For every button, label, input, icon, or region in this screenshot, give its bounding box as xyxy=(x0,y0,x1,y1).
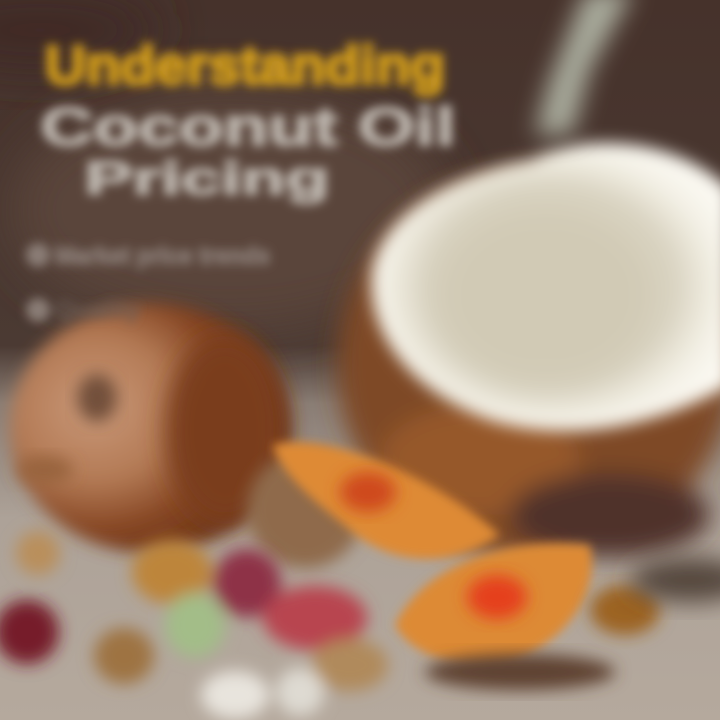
illustration: whole coconut xyxy=(10,303,290,553)
coconut shell xyxy=(337,170,720,560)
large orange slice xyxy=(272,442,500,559)
coconut eye xyxy=(77,374,117,422)
illustration: scattered berries and nuts xyxy=(0,531,388,719)
illustration: halved coconut with spoon xyxy=(337,0,720,560)
spoon handle xyxy=(535,0,634,135)
bullet one: Market price trends xyxy=(55,242,270,270)
title line 1: Understanding xyxy=(45,34,445,96)
bullet text block xyxy=(26,242,270,324)
bullet two: Quality xyxy=(55,297,141,324)
title xyxy=(40,34,456,204)
coconut flesh xyxy=(371,143,720,431)
title line 2: Coconut Oil xyxy=(40,97,456,157)
illustration: fruit slices xyxy=(247,442,720,690)
small orange slice xyxy=(395,543,592,665)
title line 3: Pricing xyxy=(84,152,330,204)
